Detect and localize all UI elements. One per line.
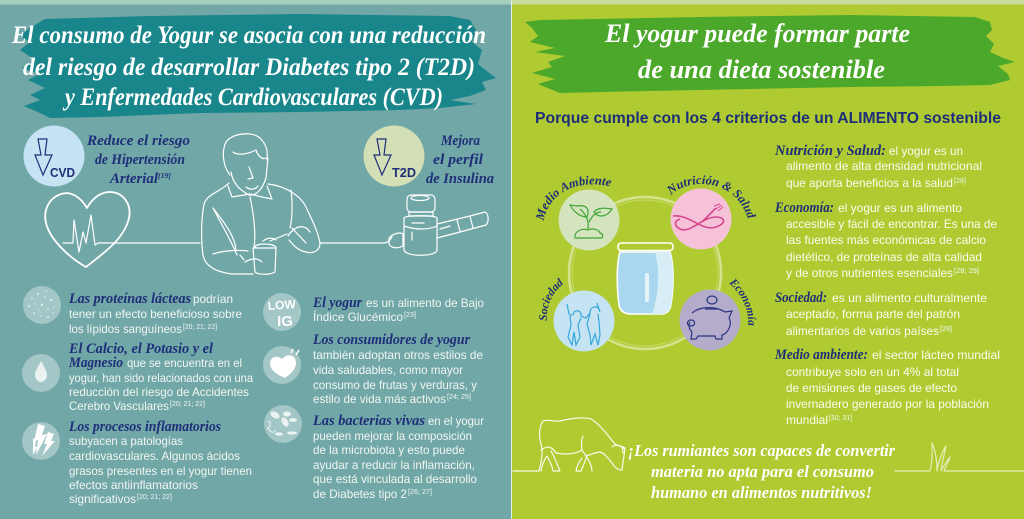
item: live bacteria: ayudar a reducir la inflamación, bbox=[313, 458, 475, 472]
text: hypertension: de Hipertensión bbox=[95, 152, 185, 168]
subheading: Porque cumple con los 4 criterios de un ALIMENTO sostenible bbox=[535, 110, 1001, 127]
text: economy: el yogur es un alimento bbox=[838, 201, 962, 215]
heading: health title: del riesgo de desarrollar Diabetes tipo 2 (T2D) bbox=[23, 54, 475, 81]
item: dairy proteins: Las proteínas lácteas bbox=[68, 291, 191, 307]
icon: yogurt jar bbox=[617, 243, 673, 314]
item: minerals: que se encuentra en el bbox=[127, 356, 242, 370]
text: economy: Economía: bbox=[774, 200, 834, 216]
icon: heart with ecg bbox=[45, 192, 200, 267]
text: environment: de emisiones de gases de efecto bbox=[786, 381, 957, 395]
icon: grazing cow bbox=[513, 418, 625, 471]
text: insulin bbox=[426, 133, 494, 187]
text: society: [28] bbox=[940, 326, 952, 333]
item: minerals: Cerebro Vasculares bbox=[69, 399, 169, 413]
item: minerals: El Calcio, el Potasio y el bbox=[68, 341, 214, 357]
item: glycemic index bbox=[263, 293, 484, 331]
callout: ruminants bbox=[628, 441, 895, 502]
text: nutrition and health: [28] bbox=[954, 178, 966, 185]
icon: economy bbox=[680, 290, 740, 350]
text: society: alimentarios de varios países bbox=[786, 324, 939, 338]
icon: drop bbox=[22, 354, 60, 392]
item: live bacteria: de Diabetes tipo 2 bbox=[313, 487, 407, 501]
callout: ruminants: ¡Los rumiantes son capaces de convertir bbox=[628, 441, 895, 460]
item: glycemic index: Índice Glucémico bbox=[313, 309, 403, 324]
text: nutrition and health: que aporta beneficios a la salud bbox=[786, 176, 953, 190]
icon: apple heart bbox=[263, 346, 301, 384]
item: inflammation: Los procesos inflamatorios bbox=[68, 419, 221, 435]
heading: health title: y Enfermedades Cardiovasculares (CVD) bbox=[62, 84, 443, 111]
text: economy bbox=[774, 200, 997, 280]
text: nutrition and health: el yogur es un bbox=[889, 144, 963, 158]
item: healthy lifestyles: vida saludables, como mayor bbox=[313, 363, 463, 377]
text: nutrition and health: alimento de alta densidad nutricional bbox=[786, 159, 982, 173]
item: glycemic index: es un alimento de Bajo bbox=[366, 296, 484, 310]
item: dairy proteins: los lípidos sanguíneos bbox=[69, 322, 182, 336]
text: economy: las fuentes más económicas de calcio bbox=[786, 233, 986, 247]
text: economy: accesible y fácil de encontrar. Es una de bbox=[786, 217, 997, 231]
icon: low IG: LOW bbox=[267, 297, 297, 313]
item: inflammation: subyacen a patologías bbox=[69, 434, 183, 448]
item: live bacteria bbox=[264, 405, 484, 501]
icon: environment bbox=[558, 190, 620, 250]
icon: CVD badge bbox=[24, 126, 84, 186]
text: environment bbox=[774, 347, 1000, 427]
label: economy: Economía bbox=[729, 278, 756, 326]
icon: CVD badge: CVD bbox=[50, 165, 75, 180]
text: economy: y de otros nutrientes esenciales bbox=[786, 266, 953, 280]
item: dairy proteins: tener un efecto beneficioso sobre bbox=[69, 307, 242, 321]
label: nutrition: Nutrición & Salud bbox=[667, 175, 756, 218]
icon: lightning bbox=[22, 422, 60, 460]
heading: health title: El consumo de Yogur se asocia con una reducción bbox=[11, 22, 486, 49]
item: live bacteria: en el yogur bbox=[428, 414, 484, 428]
heading: sustainability title: El yogur puede formar parte bbox=[604, 19, 910, 48]
text: environment: Medio ambiente: bbox=[774, 347, 868, 363]
text: nutrition and health: Nutrición y Salud: bbox=[774, 143, 886, 159]
icon: nutrition bbox=[670, 188, 732, 250]
item: dairy proteins: [20; 21; 22] bbox=[183, 324, 217, 331]
label: environment: Medio Ambiente bbox=[536, 176, 612, 221]
item: minerals: [20; 21; 22] bbox=[170, 401, 205, 408]
text: environment: invernadero generado por la población bbox=[786, 397, 989, 411]
icon: insulin pen and vial bbox=[320, 195, 488, 255]
panel: sustainability bbox=[512, 0, 1024, 519]
illustration: man eating yogurt bbox=[202, 134, 320, 274]
item: live bacteria: de la microbiota y esto puede bbox=[313, 443, 465, 457]
item: inflammation bbox=[22, 419, 252, 506]
item: live bacteria: [26; 27] bbox=[408, 489, 432, 496]
text: insulin: Mejora bbox=[440, 133, 480, 149]
text: economy: [28; 29] bbox=[954, 268, 979, 275]
text: society: Sociedad: bbox=[775, 290, 827, 306]
label: society: Sociedad bbox=[539, 278, 564, 321]
heading: health title bbox=[11, 14, 496, 118]
text: hypertension: Arterial bbox=[109, 171, 159, 187]
item: inflammation: cardiovasculares. Algunos ácidos bbox=[69, 449, 240, 463]
divider bbox=[511, 0, 512, 519]
diagram: four criteria bbox=[536, 175, 756, 352]
icon: low IG bbox=[263, 293, 301, 331]
item: minerals: Magnesio bbox=[68, 355, 123, 371]
item: minerals: reducción del riesgo de Accidentes bbox=[69, 385, 249, 399]
item: glycemic index: [23] bbox=[404, 312, 416, 319]
item: healthy lifestyles: Los consumidores de yogur bbox=[312, 332, 470, 348]
icon: low IG: IG bbox=[277, 313, 293, 330]
icon: grass bbox=[895, 443, 1024, 471]
text: hypertension bbox=[86, 133, 190, 187]
text: environment: el sector lácteo mundial bbox=[872, 348, 1000, 362]
text: society: aceptado, forma parte del patrón bbox=[786, 307, 960, 321]
text: society bbox=[775, 290, 987, 338]
item: glycemic index: El yogur bbox=[312, 295, 362, 311]
item: inflammation: efectos antiinflamatorios bbox=[69, 478, 198, 492]
heading: sustainability title bbox=[525, 15, 1015, 93]
item: healthy lifestyles bbox=[263, 332, 483, 406]
item: healthy lifestyles: estilo de vida más activos bbox=[313, 392, 446, 406]
item: inflammation: grasos presentes en el yogur tienen bbox=[69, 464, 252, 478]
text: society: es un alimento culturalmente bbox=[832, 291, 987, 305]
callout: ruminants: humano en alimentos nutritivos! bbox=[651, 483, 872, 502]
item: dairy proteins: podrían bbox=[193, 292, 233, 306]
item: inflammation: [20; 21; 22] bbox=[137, 494, 172, 501]
icon: proteins bbox=[23, 286, 61, 324]
item: healthy lifestyles: [24; 25] bbox=[447, 394, 471, 401]
item: live bacteria: que está vinculada al desarrollo bbox=[313, 472, 477, 486]
text: economy: dietético, de proteínas de alta calidad bbox=[786, 250, 982, 264]
item: healthy lifestyles: también adoptan otros estilos de bbox=[313, 348, 483, 362]
text: insulin: el perfil bbox=[433, 152, 484, 168]
item: dairy proteins bbox=[23, 286, 242, 336]
text: hypertension: [19] bbox=[158, 172, 172, 180]
text: nutrition and health bbox=[774, 143, 982, 190]
text: insulin: de Insulina bbox=[426, 171, 494, 187]
item: healthy lifestyles: consumo de frutas y verduras, y bbox=[313, 378, 477, 392]
heading: sustainability title: de una dieta sostenible bbox=[638, 55, 885, 84]
panel: health bbox=[0, 0, 512, 519]
text: environment: [30; 31] bbox=[829, 415, 852, 422]
callout: ruminants: materia no apta para el consumo bbox=[651, 462, 874, 481]
text: hypertension: Reduce el riesgo bbox=[86, 133, 190, 149]
icon: T2D badge: T2D bbox=[392, 165, 416, 180]
item: minerals: yogur, han sido relacionados con una bbox=[69, 371, 253, 385]
icon: society bbox=[554, 290, 614, 352]
item: inflammation: significativos bbox=[69, 492, 136, 506]
text: environment: contribuye solo en un 4% al total bbox=[786, 365, 959, 379]
icon: bacteria bbox=[264, 405, 302, 443]
text: environment: mundial bbox=[786, 413, 828, 427]
item: live bacteria: pueden mejorar la composición bbox=[313, 429, 472, 443]
icon: T2D badge bbox=[364, 126, 424, 186]
item: minerals bbox=[22, 341, 253, 413]
item: live bacteria: Las bacterias vivas bbox=[312, 413, 425, 429]
